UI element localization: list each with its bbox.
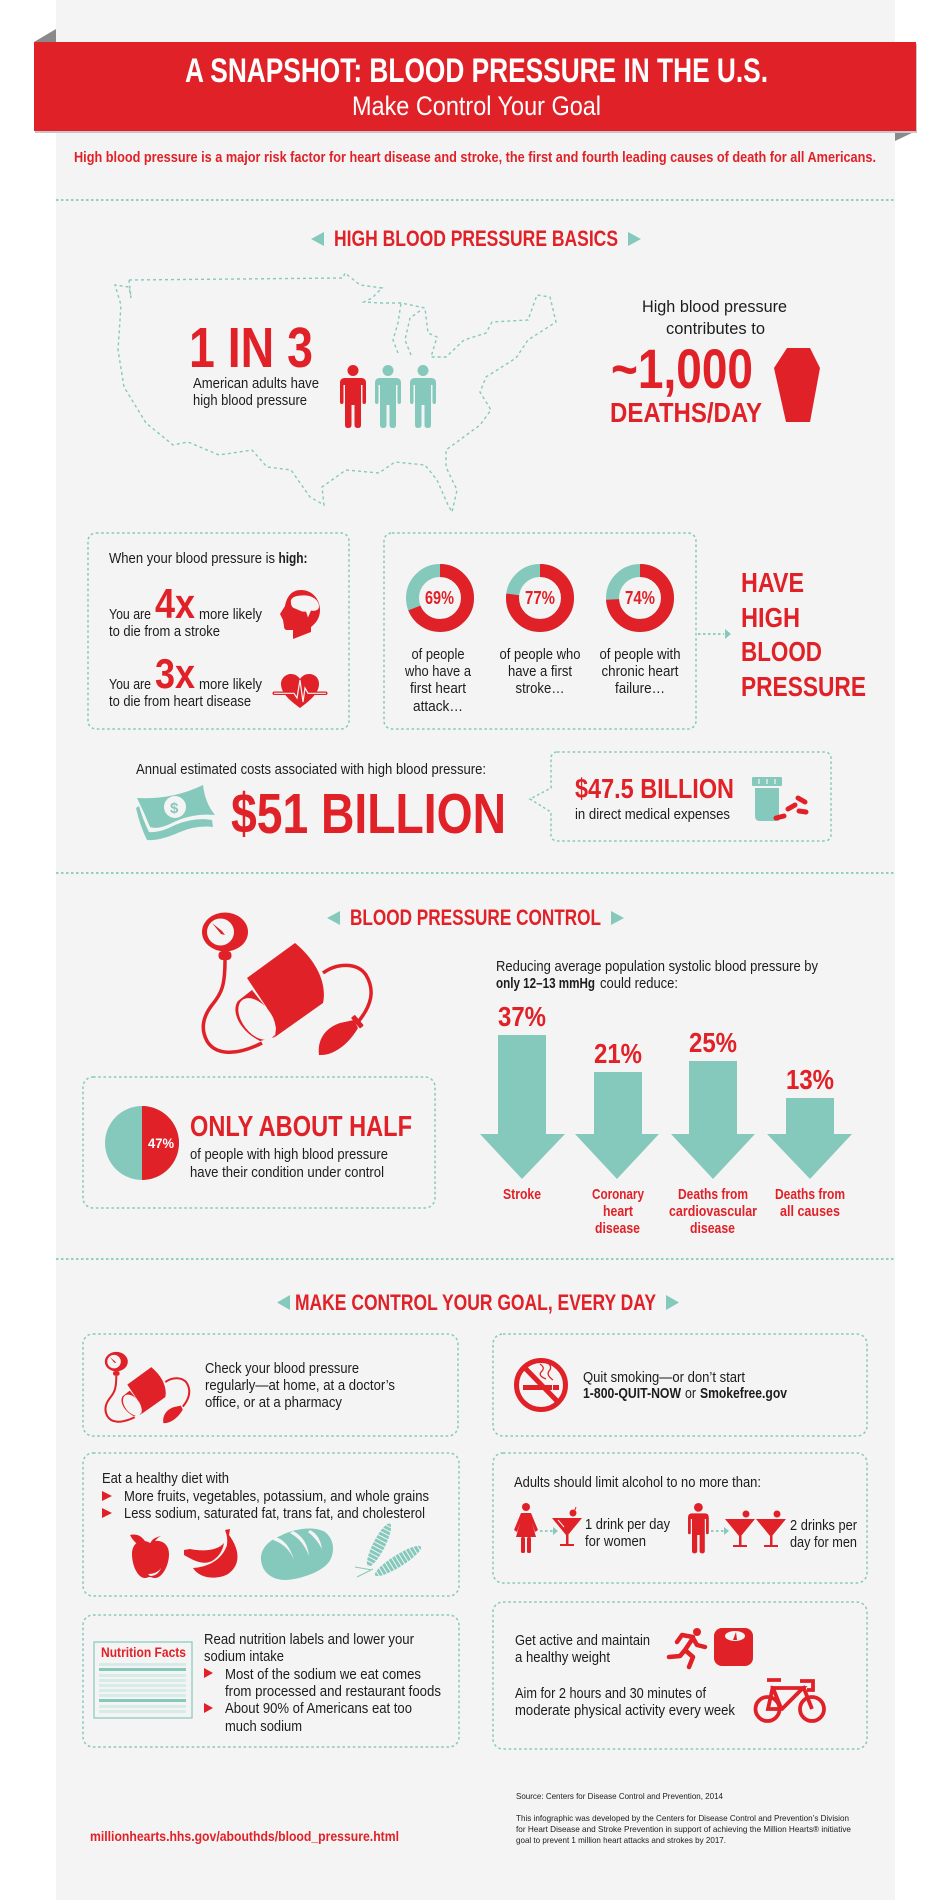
arrow chart: deaths from all causes 13%: all causes — [780, 1203, 840, 1220]
icon: martini — [552, 1507, 582, 1546]
panel: nutrition labels: Read nutrition labels and lower your — [204, 1631, 414, 1648]
panel: limit alcohol: day for men — [790, 1534, 857, 1551]
panel: only about half: ONLY ABOUT HALF — [190, 1111, 412, 1143]
text: reducing systolic blood pressure: could reduce: — [600, 975, 678, 992]
banner — [34, 29, 917, 141]
arrow chart: stroke 37% — [480, 1001, 565, 1203]
source and credits: goal to prevent 1 million heart attacks and strokes by 2017. — [516, 1835, 726, 1845]
icon: wheat — [355, 1521, 424, 1580]
stat: deaths per day: contributes to — [666, 319, 765, 338]
panel: get active: a healthy weight — [515, 1649, 611, 1666]
panel: quit smoking: Quit smoking—or don’t start — [583, 1369, 746, 1386]
panel: direct medical expenses: in direct medical expenses — [575, 806, 730, 823]
panel: risk when blood pressure is high: high: — [278, 550, 308, 567]
arrow chart: coronary heart disease 21%: heart — [603, 1203, 633, 1220]
arrow chart: deaths from cardiovascular disease 25%: Deaths from — [678, 1186, 748, 1203]
donut: 69% — [412, 570, 468, 626]
arrow — [540, 1527, 558, 1535]
panel: donut charts — [384, 533, 696, 729]
pie chart: 47%: 47% — [148, 1135, 175, 1151]
source and credits: for Heart Disease and Stroke Prevention in support of achieving the Million Hearts® initiative — [516, 1824, 851, 1834]
callout: have high blood pressure: BLOOD — [741, 636, 822, 667]
icon: money: $ — [170, 800, 179, 817]
panel: direct medical expenses: $47.5 BILLION — [575, 773, 734, 804]
panel: limit alcohol — [493, 1453, 867, 1583]
callout: have high blood pressure: HAVE — [741, 567, 804, 598]
icon: blood pressure cuff — [202, 912, 371, 1055]
arrow chart: coronary heart disease 21%: 21% — [594, 1038, 642, 1069]
donut: 74% — [612, 570, 668, 626]
panel: check your blood pressure — [83, 1334, 458, 1436]
panel: risk when blood pressure is high — [88, 533, 349, 729]
panel: direct medical expenses — [530, 752, 831, 841]
icon: nutrition facts label — [94, 1642, 192, 1718]
icon: nutrition facts label: Nutrition Facts — [101, 1644, 186, 1660]
callout: have high blood pressure — [741, 567, 866, 702]
callout: have high blood pressure: PRESSURE — [741, 671, 866, 702]
stat: 1 in 3: high blood pressure — [193, 392, 307, 409]
icon: apple — [130, 1534, 169, 1578]
text: reducing systolic blood pressure — [496, 958, 818, 992]
panel: healthy diet: Less sodium, saturated fat, trans fat, and cholesterol — [124, 1505, 425, 1522]
label: heart attack: first heart — [410, 680, 467, 697]
icon: three people — [340, 365, 436, 428]
panel: quit smoking — [493, 1334, 867, 1436]
panel: healthy diet: More fruits, vegetables, potassium, and whole grains — [124, 1488, 429, 1505]
arrow chart: coronary heart disease 21%: disease — [595, 1220, 640, 1237]
label: heart attack: of people — [412, 646, 464, 663]
panel: get active — [493, 1602, 867, 1749]
heading: high blood pressure basics: HIGH BLOOD PRESSURE BASICS — [334, 226, 618, 251]
label: stroke: of people who — [500, 646, 580, 663]
panel: limit alcohol: for women — [585, 1533, 646, 1550]
panel: get active: moderate physical activity every week — [515, 1702, 735, 1719]
arrow chart: deaths from all causes 13%: 13% — [786, 1064, 834, 1095]
icon: head with brain — [280, 590, 320, 639]
label: stroke — [500, 646, 580, 697]
label: heart attack: who have a — [404, 663, 472, 680]
arrow chart: deaths from cardiovascular disease 25% — [669, 1027, 757, 1237]
panel: nutrition labels: from processed and restaurant foods — [225, 1683, 441, 1700]
icon: scale — [714, 1628, 753, 1666]
text: reducing systolic blood pressure: only 12–13 mmHg — [496, 975, 595, 992]
label: chronic heart failure: of people with — [600, 646, 680, 663]
panel: limit alcohol: Adults should limit alcohol to no more than: — [514, 1474, 761, 1491]
stat: deaths per day: High blood pressure — [642, 297, 787, 316]
arrow chart: coronary heart disease 21% — [575, 1038, 659, 1237]
panel: only about half — [83, 1077, 435, 1208]
panel: risk when blood pressure is high: to die from heart disease — [109, 693, 251, 710]
panel: quit smoking: Smokefree.gov — [700, 1385, 788, 1402]
panel: only about half: have their condition under control — [190, 1164, 384, 1181]
arrow chart: coronary heart disease 21%: Coronary — [592, 1186, 645, 1203]
panel: risk when blood pressure is high: more likely — [199, 606, 262, 623]
icon: coffin — [774, 348, 820, 422]
panel: check your blood pressure: Check your blood pressure — [205, 1360, 359, 1377]
label: heart attack: attack… — [413, 698, 463, 715]
panel: nutrition labels: much sodium — [225, 1718, 302, 1735]
stat: 1 in 3 — [189, 316, 436, 428]
panel: limit alcohol: 2 drinks per — [790, 1517, 857, 1534]
icon: bananas — [184, 1529, 238, 1578]
callout: have high blood pressure: HIGH — [741, 602, 800, 633]
panel: risk when blood pressure is high: more likely — [199, 676, 262, 693]
title: A SNAPSHOT: BLOOD PRESSURE IN THE U.S. — [185, 52, 768, 90]
text: reducing systolic blood pressure: Reducing average population systolic blood pressure by — [496, 958, 818, 975]
panel: check your blood pressure: regularly—at home, at a doctor’s — [205, 1377, 395, 1394]
donut: 74%: 74% — [625, 588, 655, 608]
panel: nutrition labels — [83, 1615, 459, 1747]
icon: woman — [514, 1503, 538, 1553]
icon: bread — [261, 1529, 333, 1580]
heading: blood pressure control: BLOOD PRESSURE CONTROL — [350, 905, 601, 930]
stat: deaths per day: ~1,000 — [611, 337, 753, 400]
arrow chart: deaths from all causes 13%: Deaths from — [775, 1186, 845, 1203]
subtitle: Make Control Your Goal — [352, 91, 601, 121]
panel: check your blood pressure: office, or at a pharmacy — [205, 1394, 342, 1411]
panel: risk when blood pressure is high: to die from a stroke — [109, 623, 220, 640]
icon: small blood pressure cuff — [105, 1352, 189, 1423]
arrow — [711, 1527, 729, 1535]
map of the U.S. — [115, 273, 556, 512]
panel: get active: Get active and maintain — [515, 1632, 650, 1649]
donut: 69%: 69% — [425, 588, 454, 608]
label: stroke: have a first — [508, 663, 573, 680]
icon: runner — [669, 1628, 705, 1667]
stat: 1 in 3: 1 IN 3 — [189, 316, 313, 380]
icon: bicycle — [756, 1680, 824, 1721]
panel: limit alcohol: 1 drink per day — [585, 1516, 670, 1533]
panel: get active: Aim for 2 hours and 30 minutes of — [515, 1685, 707, 1702]
annual costs: $51 BILLION — [231, 782, 506, 846]
panel: risk when blood pressure is high: You are — [109, 606, 151, 623]
pie chart: 47% — [105, 1106, 179, 1180]
source and credits: Source: Centers for Disease Control and Prevention, 2014 — [516, 1791, 723, 1801]
panel: quit smoking: 1-800-QUIT-NOW — [583, 1385, 682, 1402]
heading: make control your goal: MAKE CONTROL YOUR GOAL, EVERY DAY — [295, 1290, 656, 1315]
donut: 77%: 77% — [525, 588, 555, 608]
panel: healthy diet: Eat a healthy diet with — [102, 1470, 229, 1487]
annual costs — [136, 761, 506, 846]
panel: risk when blood pressure is high: 4x — [155, 580, 196, 627]
label: chronic heart failure: failure… — [615, 680, 665, 697]
icon: man — [688, 1503, 709, 1553]
icon: money — [136, 785, 215, 840]
panel: risk when blood pressure is high: 3x — [155, 650, 196, 697]
panel: quit smoking: or — [685, 1385, 696, 1402]
arrow chart: deaths from all causes 13% — [767, 1064, 852, 1220]
source and credits — [516, 1791, 851, 1845]
icon: pill bottle — [752, 777, 806, 821]
icon: two martinis — [725, 1510, 786, 1547]
panel: risk when blood pressure is high: When your blood pressure is — [109, 550, 275, 567]
arrow chart: deaths from cardiovascular disease 25%: 25% — [689, 1027, 737, 1058]
panel: only about half: of people with high blood pressure — [190, 1146, 388, 1163]
url: millionhearts.hhs.gov/abouthds/blood_pressure.html — [90, 1828, 399, 1844]
panel: risk when blood pressure is high: You are — [109, 676, 151, 693]
label: stroke: stroke… — [516, 680, 564, 697]
donut: 77% — [512, 570, 568, 626]
stat: deaths per day — [610, 297, 820, 428]
annual costs: Annual estimated costs associated with high blood pressure: — [136, 761, 486, 778]
arrow chart: stroke 37%: Stroke — [503, 1186, 541, 1203]
panel: nutrition labels: Most of the sodium we eat comes — [225, 1666, 421, 1683]
label: chronic heart failure: chronic heart — [602, 663, 679, 680]
arrow to have high blood pressure — [698, 629, 731, 639]
panel: nutrition labels: About 90% of Americans eat too — [225, 1700, 412, 1717]
panel: healthy diet — [83, 1453, 459, 1596]
source and credits: This infographic was developed by the Centers for Disease Control and Prevention’s Division — [516, 1813, 849, 1823]
stat: deaths per day: DEATHS/DAY — [610, 397, 762, 428]
label: heart attack — [404, 646, 472, 715]
arrow chart: stroke 37%: 37% — [498, 1001, 546, 1032]
icon: no smoking — [516, 1360, 566, 1410]
panel: nutrition labels: sodium intake — [204, 1648, 284, 1665]
stat: 1 in 3: American adults have — [193, 375, 319, 392]
arrow chart: deaths from cardiovascular disease 25%: disease — [690, 1220, 735, 1237]
label: chronic heart failure — [600, 646, 680, 697]
icon: heart with pulse — [272, 674, 328, 708]
arrow chart: deaths from cardiovascular disease 25%: cardiovascular — [669, 1203, 757, 1220]
